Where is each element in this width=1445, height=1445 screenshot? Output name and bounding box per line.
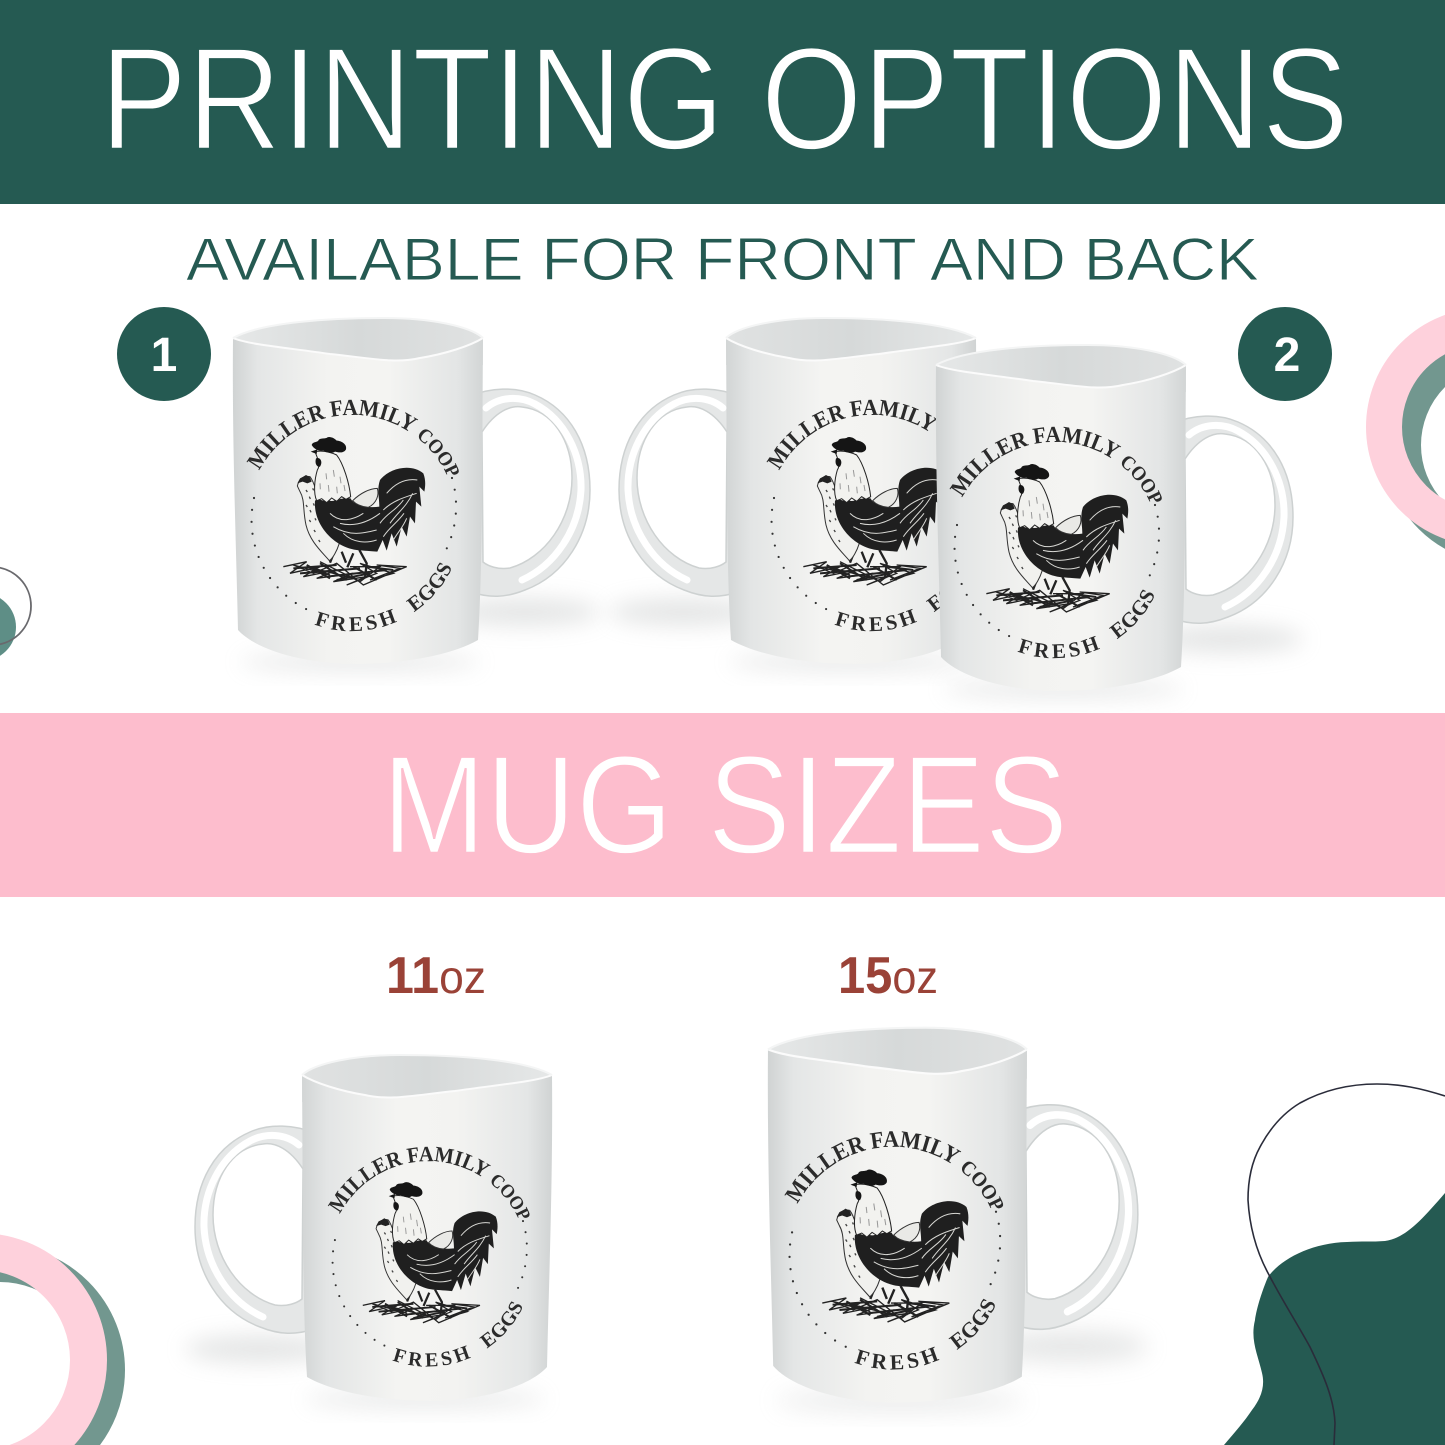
label: 11oz: 11oz — [386, 947, 486, 1005]
mug 5: 15oz, handle right: COOP — [962, 1162, 1004, 1208]
mug 5: 15oz, handle right: EGGS — [948, 1298, 995, 1350]
heading: mug sizes: MUG SIZES — [382, 726, 1068, 883]
mug 4: 11oz, handle left: EGGS — [479, 1301, 522, 1348]
mug 2: back print behind, handle left — [615, 317, 976, 674]
mug 1: front print, handle right: FRESH — [314, 608, 397, 632]
mug 5: 15oz, handle right — [768, 1026, 1142, 1414]
mug 3: back print in front, handle right — [936, 344, 1297, 702]
mug 1: front print, handle right: COOP — [418, 429, 459, 475]
mug 2: back print behind, handle left: MILLER FAMILY — [766, 400, 936, 470]
mug 4: 11oz, handle left: FRESH — [392, 1345, 471, 1367]
mug 1: front print, handle right — [232, 317, 594, 674]
badge 1: 1 — [151, 329, 177, 382]
mug 5: 15oz, handle right: MILLER FAMILY — [784, 1131, 962, 1204]
decoration: bottom-left rings — [0, 1252, 106, 1445]
decoration: left small circles — [0, 567, 31, 661]
decoration: bottom-right blob and line — [1224, 1084, 1445, 1445]
mug 3: back print in front, handle right: EGGS — [1109, 590, 1154, 640]
mug 1: front print, handle right: MILLER FAMILY — [246, 400, 418, 470]
mug 2: back print behind, handle left: FRESH — [834, 608, 917, 632]
mug 4: 11oz, handle left: COOP — [492, 1175, 530, 1218]
mug 2: back print behind, handle left: EGGS — [926, 591, 940, 612]
mug 3: back print in front, handle right: FRESH — [1018, 636, 1100, 658]
badge 1 — [117, 307, 211, 401]
mug 4: 11oz, handle left: MILLER FAMILY — [328, 1146, 491, 1214]
header band — [0, 0, 1445, 204]
decoration: right rings — [1384, 326, 1445, 546]
mug 4: 11oz, handle left — [191, 1054, 552, 1412]
mug 1: front print, handle right: EGGS — [406, 562, 451, 612]
badge 2 — [1238, 307, 1332, 401]
pink band — [0, 713, 1445, 897]
label: 15oz: 15oz — [838, 947, 938, 1005]
badge 2: 2 — [1274, 329, 1300, 382]
mug 3: back print in front, handle right: COOP — [1122, 456, 1162, 502]
subtitle: front and back: AVAILABLE FOR FRONT AND BACK — [186, 226, 1259, 293]
mug 5: 15oz, handle right: FRESH — [854, 1346, 940, 1370]
mug 3: back print in front, handle right: MILLER FAMILY — [950, 426, 1122, 498]
